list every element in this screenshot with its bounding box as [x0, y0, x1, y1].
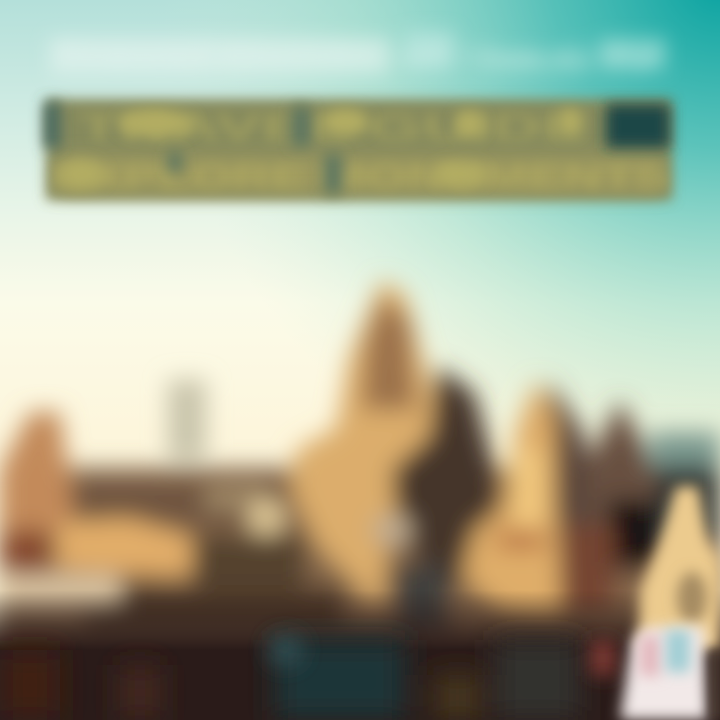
dark right block	[655, 465, 720, 545]
foreground base	[0, 590, 720, 720]
dark towers right	[548, 380, 596, 565]
dark tower	[392, 366, 498, 585]
main cathedral tower	[292, 280, 456, 610]
mid shadow	[195, 535, 305, 600]
skyline	[0, 280, 720, 720]
red accent	[590, 640, 616, 676]
heading: pale title text	[50, 32, 666, 74]
heading: pale title text: Travel Guide of the City	[50, 40, 661, 73]
warm block	[56, 518, 192, 576]
red buildings	[560, 525, 615, 615]
banner highlights	[60, 108, 582, 188]
pale block	[205, 488, 265, 508]
dark foreground	[0, 640, 580, 720]
pale distant tower	[168, 380, 206, 460]
tower shade	[362, 296, 416, 410]
banner gaps	[168, 106, 342, 194]
banner heading text: TRAVEL GUIDE	[78, 107, 588, 149]
banner subheading text: EXPLORE MONUMENTS	[52, 158, 670, 196]
coat pink accent	[640, 636, 660, 676]
far tower	[584, 400, 660, 575]
grey block	[395, 565, 450, 640]
banner left edge	[44, 102, 60, 148]
figure body	[638, 486, 720, 650]
banner dark corner	[606, 104, 670, 148]
figure coat	[620, 626, 708, 720]
banner lower row tone	[56, 156, 662, 194]
teal highlight	[269, 637, 301, 663]
ground mass	[0, 468, 720, 720]
black gap	[608, 500, 664, 566]
banner panel	[46, 99, 672, 200]
left tower	[0, 412, 76, 540]
coat blue accent	[666, 630, 690, 672]
spire highlight	[516, 450, 542, 526]
title banner	[44, 99, 672, 200]
mascot figure	[590, 486, 720, 720]
mid shadow 2	[85, 585, 345, 635]
dark right edge	[710, 650, 720, 720]
small pale spot	[372, 514, 412, 546]
left tower base	[0, 530, 50, 585]
spire band	[498, 532, 544, 548]
pale strip left	[0, 574, 120, 606]
figure face	[677, 572, 707, 624]
spire tower	[462, 380, 564, 618]
horizon haze right	[650, 432, 720, 468]
bright spot	[248, 498, 284, 538]
mid buildings	[72, 482, 282, 524]
